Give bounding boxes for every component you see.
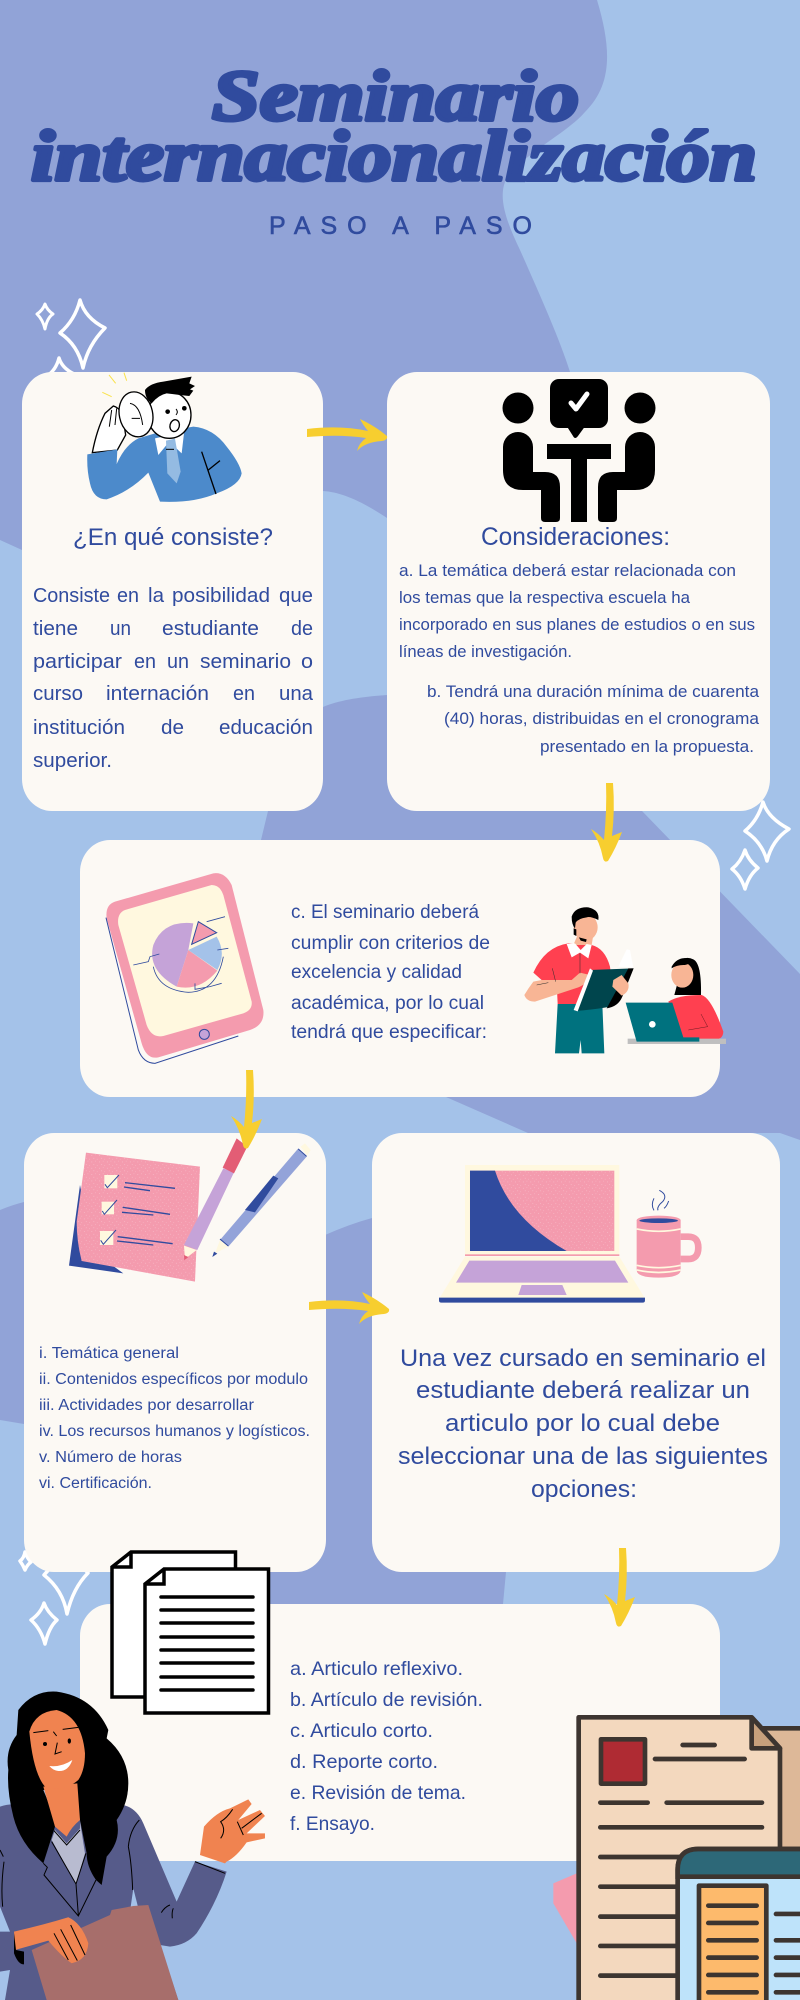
decorative stars: top left: [37, 300, 105, 395]
text block: definition: Consiste: [33, 585, 110, 607]
text block: definition: un: [110, 618, 131, 640]
text block: list i to vi: iv. Los recursos humanos y logísticos.: [39, 1423, 310, 1440]
text block: item b: (40) horas, distribuidas en el cronograma: [444, 709, 760, 728]
icon: meeting at table: [502, 379, 656, 522]
text block: item c: académica, por lo cual: [291, 993, 484, 1014]
illustration: stacked papers: [553, 1717, 800, 2000]
illustration: checklist and pencils: [69, 1138, 311, 1282]
panel: criterios: [80, 840, 726, 1097]
decorative stars: bottom left: [20, 1535, 88, 1644]
text block: item c: excelencia y calidad: [291, 962, 462, 983]
text block: definition: en: [233, 683, 255, 705]
arrow: card one to card two: [307, 419, 387, 451]
text block: definition: una: [279, 683, 314, 705]
text block: definition: curso: [33, 683, 83, 705]
text block: definition: de: [291, 618, 313, 640]
panel: lista de especificaciones: [24, 1133, 326, 1572]
text block: article instruction: estudiante deberá realizar un: [416, 1377, 750, 1404]
text block: definition: o: [301, 651, 313, 673]
text block: definition: que: [279, 585, 313, 607]
text block: item a: [399, 561, 755, 661]
panel: opciones: [80, 1604, 720, 1861]
text block: article options: c. Articulo corto.: [290, 1720, 433, 1742]
title: [31, 56, 757, 196]
text block: definition: un: [167, 651, 189, 673]
text block: list i to vi: vi. Certificación.: [39, 1475, 152, 1492]
text block: item c: c. El seminario deberá: [291, 902, 479, 923]
text block: item b: [427, 682, 760, 756]
text block: definition: [33, 585, 314, 772]
arrow: card three to card four: [231, 1070, 262, 1149]
text block: article options: b. Artículo de revisión.: [290, 1689, 483, 1711]
illustration: man listening: [87, 373, 242, 502]
text block: item c: cumplir con criterios de: [291, 933, 490, 954]
text block: definition: posibilidad: [172, 585, 270, 607]
arrow: card two to card three: [591, 783, 622, 862]
decorative stars: right: [732, 802, 789, 889]
text block: definition: de: [161, 717, 184, 739]
text block: article instruction: seleccionar una de las siguientes: [398, 1443, 768, 1470]
text block: definition: internación: [106, 683, 209, 705]
text block: article instruction: Una vez cursado en seminario el: [400, 1345, 766, 1372]
arrow: card four to card five: [309, 1292, 389, 1324]
text block: list i to vi: ii. Contenidos específicos por modulo: [39, 1371, 308, 1388]
text block: definition: la: [148, 585, 165, 607]
text block: article options: f. Ensayo.: [290, 1813, 375, 1835]
text block: article options: a. Articulo reflexivo.: [290, 1658, 463, 1680]
text block: list i to vi: i. Temática general: [39, 1345, 179, 1362]
text block: definition: educación: [219, 717, 313, 739]
text block: definition: estudiante: [162, 618, 259, 640]
text block: item a: incorporado en sus planes de estudios o en sus: [399, 615, 755, 634]
illustration: woman presenting: [0, 1692, 265, 2000]
illustration: two people with book and laptop: [524, 907, 726, 1053]
text block: item c: [291, 902, 490, 1043]
text block: list i to vi: [39, 1345, 310, 1492]
text block: item c: tendrá que especificar:: [291, 1022, 487, 1043]
text block: article instruction: opciones:: [531, 1476, 637, 1503]
text block: list i to vi: v. Número de horas: [39, 1449, 182, 1466]
background blob: top: [0, 0, 607, 550]
text block: definition: en: [117, 585, 139, 607]
title: internacionalización: [31, 116, 757, 196]
text block: item b: presentado en la propuesta.: [540, 737, 754, 756]
text block: article options: [290, 1658, 483, 1835]
text block: definition: superior.: [33, 750, 112, 772]
panel: en qué consiste: [22, 372, 323, 811]
heading: ¿En qué consiste?: [73, 524, 273, 551]
text block: definition: en: [134, 651, 156, 673]
panel: artículo: [372, 1133, 780, 1572]
background blob: lower: [0, 1202, 506, 1604]
panel: consideraciones: [387, 372, 770, 811]
text block: definition: seminario: [200, 651, 291, 673]
icon: stacked documents: [112, 1552, 268, 1713]
text block: definition: tiene: [33, 618, 78, 640]
text block: item a: líneas de investigación.: [399, 642, 572, 661]
subtitle: PASO A PASO: [269, 212, 532, 240]
text block: item b: b. Tendrá una duración mínima de cuarenta: [427, 682, 760, 701]
text block: item a: a. La temática deberá estar relacionada con: [399, 561, 736, 580]
title: Seminario: [212, 56, 579, 136]
text block: article options: d. Reporte corto.: [290, 1751, 438, 1773]
background blob: middle: [261, 695, 800, 1140]
arrow: card five to card six: [604, 1548, 635, 1627]
text block: definition: participar: [33, 651, 122, 673]
text block: article instruction: articulo por lo cual debe: [445, 1410, 720, 1437]
text block: article options: e. Revisión de tema.: [290, 1782, 466, 1804]
illustration: tablet with pie chart: [106, 873, 263, 1063]
text block: article instruction: [398, 1345, 768, 1503]
text block: item a: los temas que la respectiva escuela ha: [399, 588, 691, 607]
text block: definition: institución: [33, 717, 125, 739]
illustration: laptop and mug: [439, 1165, 698, 1303]
text block: list i to vi: iii. Actividades por desarrollar: [39, 1397, 254, 1414]
heading: Consideraciones:: [481, 523, 670, 551]
